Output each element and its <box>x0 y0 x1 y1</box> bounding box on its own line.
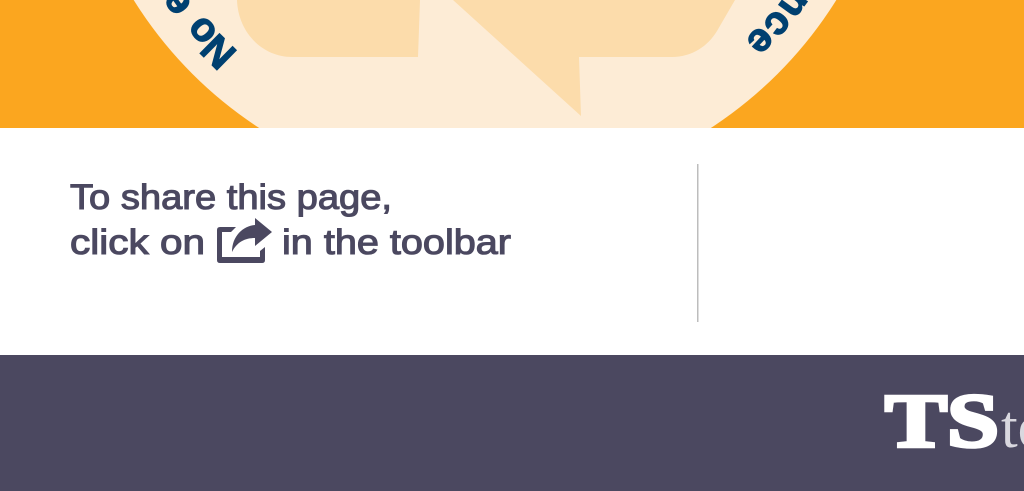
cream circle <box>134 0 836 128</box>
circular text: left <box>152 0 244 77</box>
circular text: left: N <box>193 25 244 77</box>
share instruction text <box>70 178 511 262</box>
logo: TS <box>885 380 999 464</box>
left speech bubble <box>237 0 420 57</box>
right speech bubble <box>453 0 735 116</box>
footer bar <box>0 355 1024 491</box>
share instruction text: in the toolbar <box>282 223 511 262</box>
circular text: right <box>738 0 820 65</box>
share instruction text: click on <box>70 223 205 262</box>
icon: share arrow <box>217 218 272 263</box>
circular text: right: c <box>755 2 803 47</box>
share instruction text: To share this page, <box>70 178 392 217</box>
circular text: right: e <box>738 19 785 65</box>
circular text: left: o <box>177 8 226 55</box>
divider <box>697 164 698 322</box>
logo <box>885 380 1024 464</box>
panel: orange banner with circle <box>0 0 1024 128</box>
